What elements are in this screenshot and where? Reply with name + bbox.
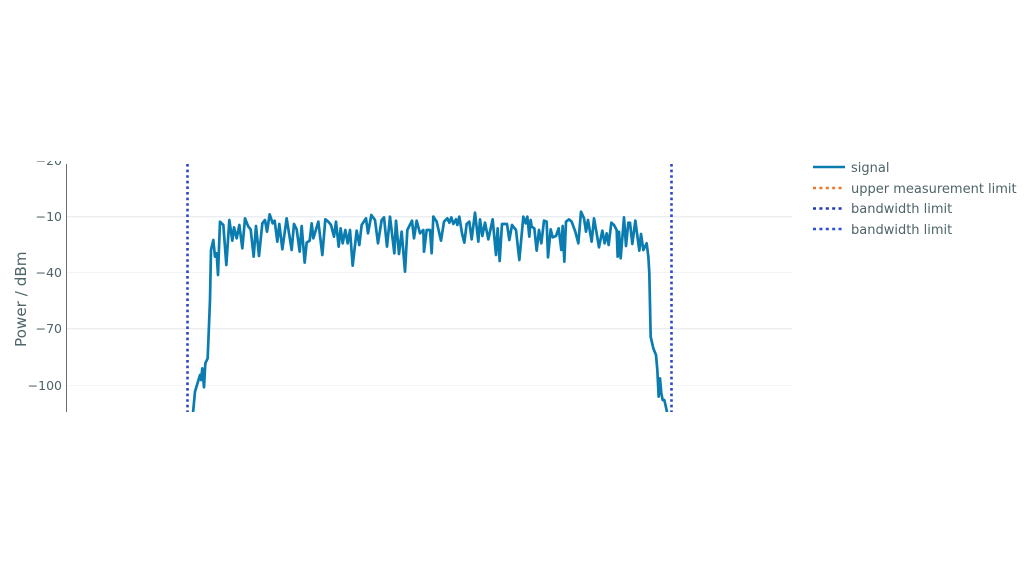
y axis tick labels: −70 xyxy=(36,321,62,336)
left bandwidth limit line xyxy=(186,164,189,412)
legend item: upper measurement limit: upper measurement limit xyxy=(851,182,1017,197)
y axis tick labels: −40 xyxy=(36,265,62,280)
signal trace xyxy=(193,212,668,417)
legend item: bandwidth limit: bandwidth limit xyxy=(851,223,952,238)
y axis tick labels: −20 xyxy=(36,153,62,168)
y axis title: Power / dBm xyxy=(12,251,30,347)
legend xyxy=(813,161,1017,238)
line chart of signal power xyxy=(14,161,1016,412)
y axis tick labels: −100 xyxy=(28,378,62,393)
legend item: signal xyxy=(813,161,889,176)
y axis tick labels xyxy=(28,153,62,393)
legend item: bandwidth limit: bandwidth limit xyxy=(851,202,952,217)
y axis line xyxy=(66,164,67,412)
y axis tick labels: −10 xyxy=(36,209,62,224)
right bandwidth limit line xyxy=(670,164,673,412)
legend item: signal: signal xyxy=(851,161,889,176)
